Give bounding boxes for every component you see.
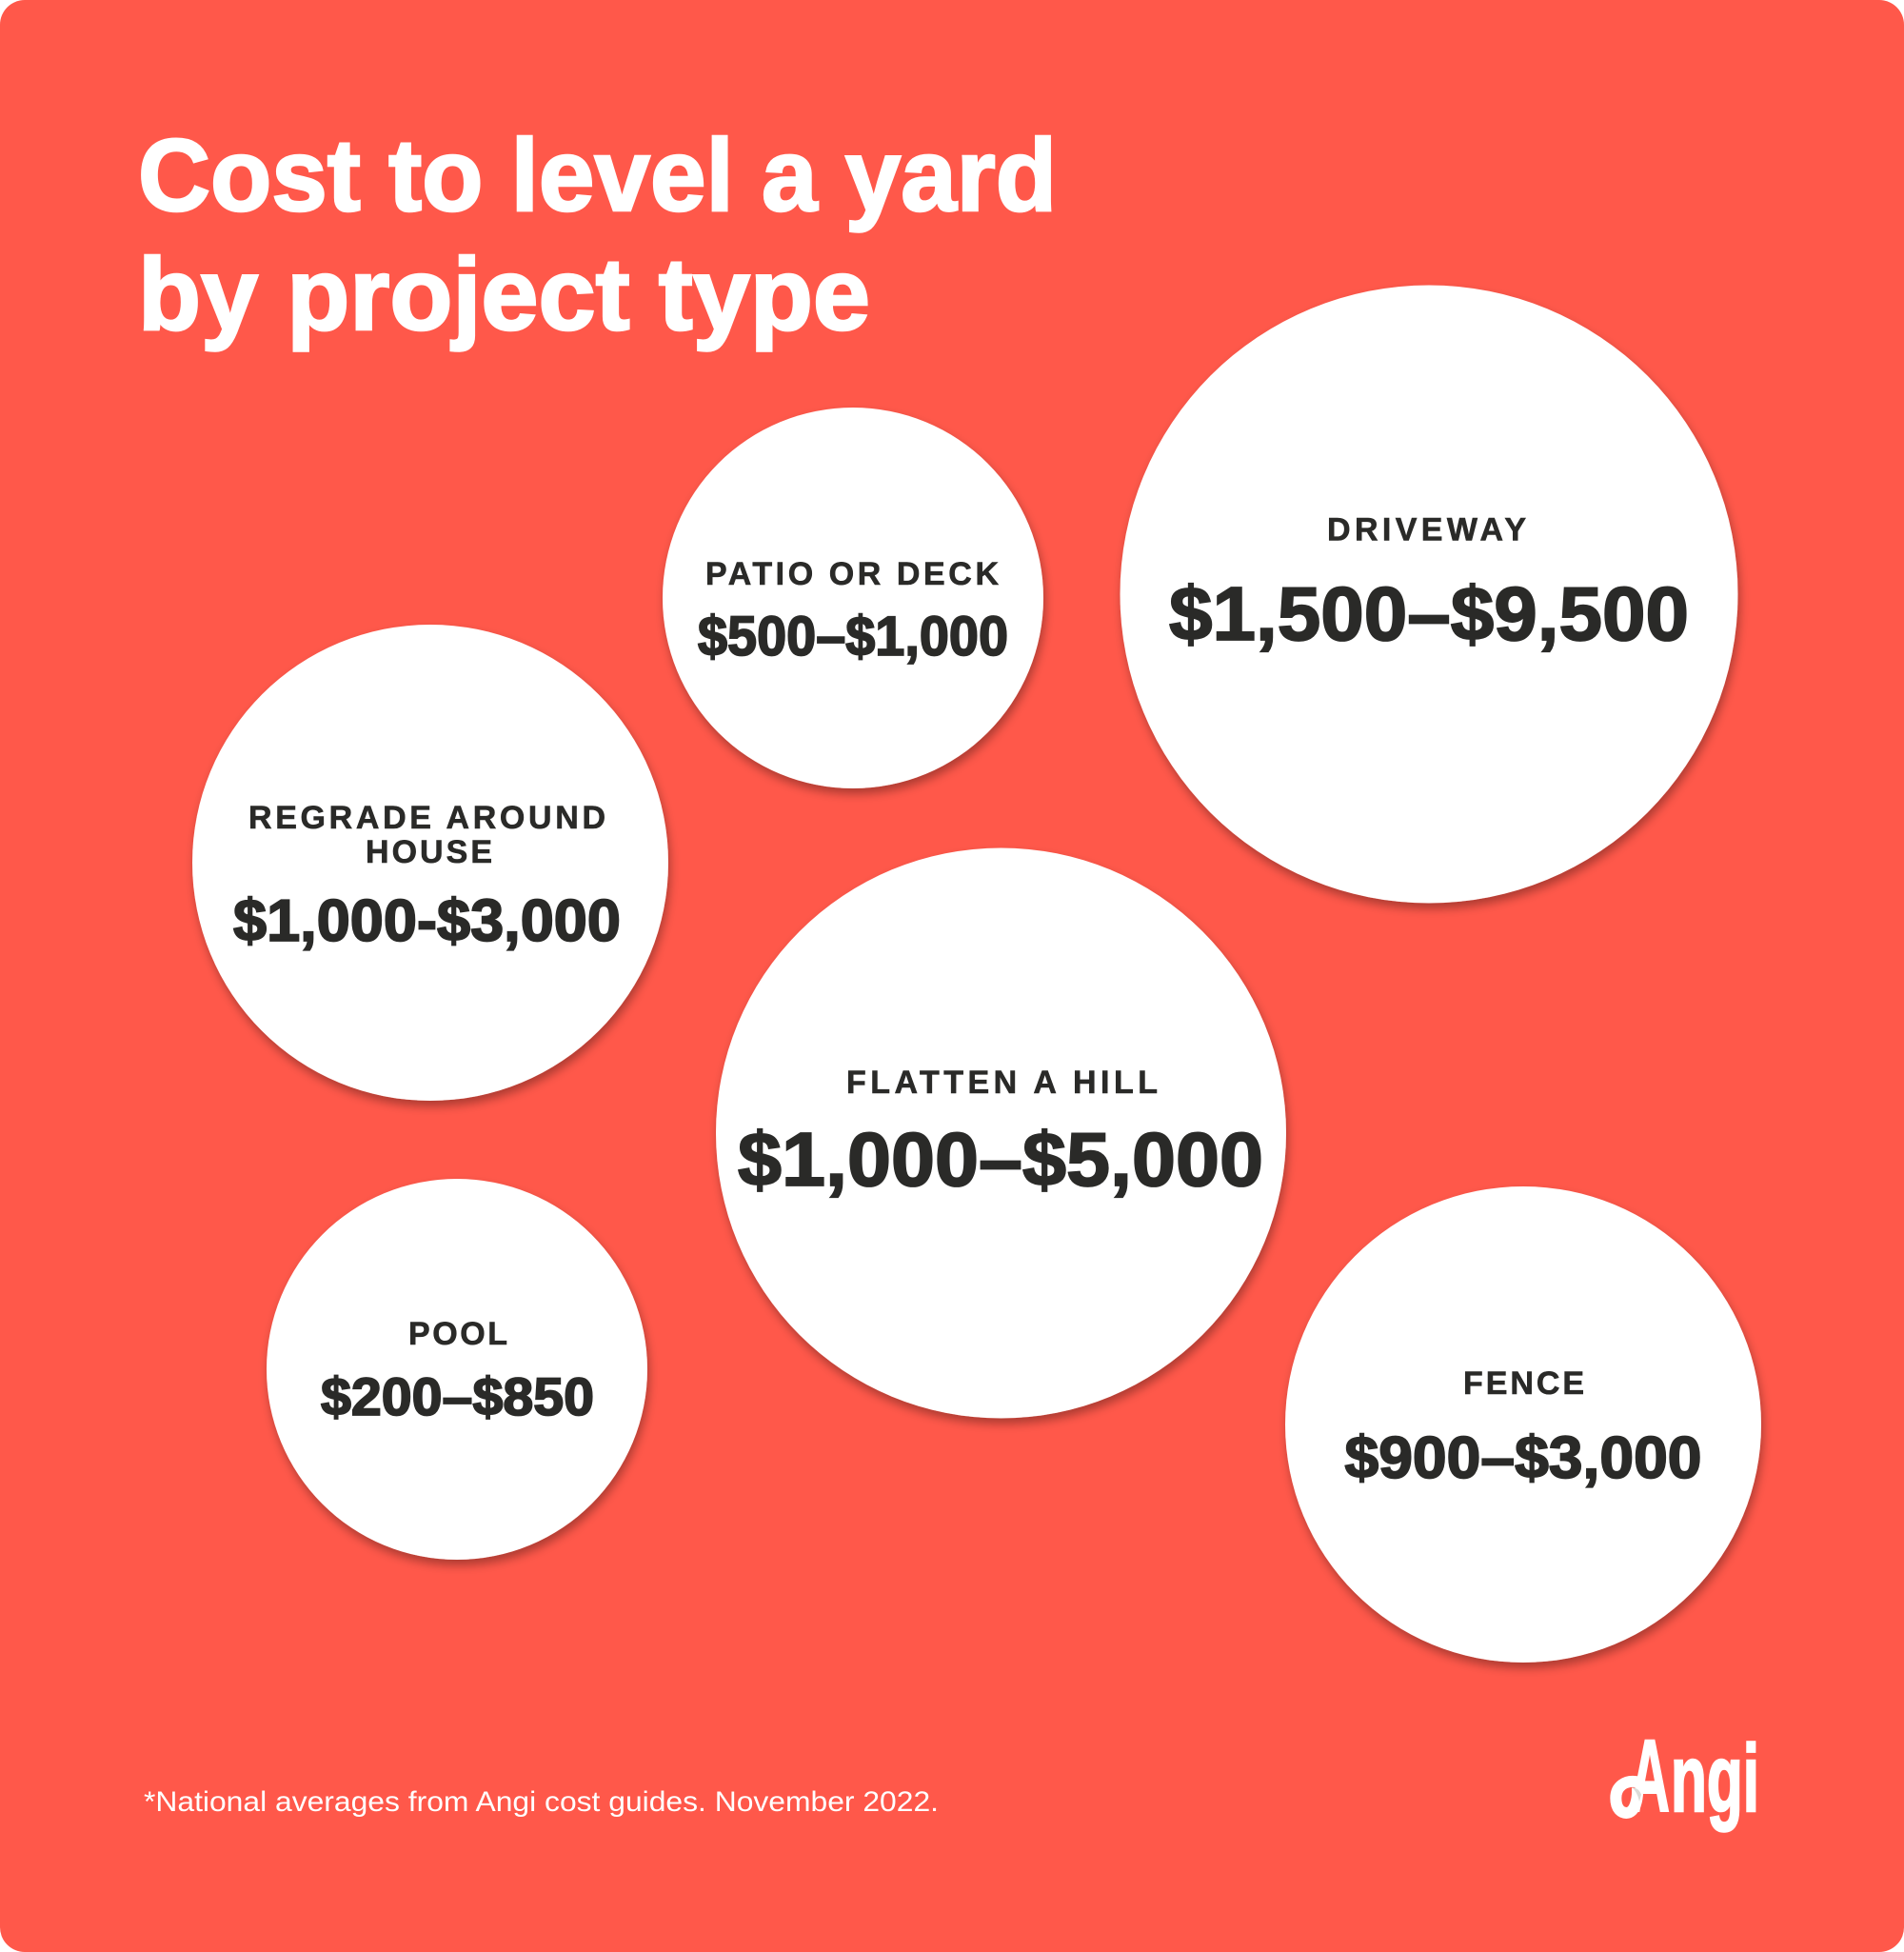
- bubble: fence: [1285, 1186, 1761, 1663]
- logo: Angi: ngi: [1671, 1725, 1759, 1832]
- label: regrade around house: HOUSE: [366, 834, 492, 870]
- amount: fence: $900–$3,000: [1344, 1425, 1702, 1491]
- title: Cost to level a yard: [138, 117, 1057, 232]
- label: flatten a hill: FLATTEN A HILL: [846, 1065, 1158, 1101]
- logo: Angi: [1616, 1718, 1759, 1833]
- bubble: driveway: [1120, 286, 1738, 903]
- amount: flatten a hill: $1,000–$5,000: [738, 1117, 1263, 1202]
- label: driveway: DRIVEWAY: [1327, 512, 1526, 548]
- amount: pool: $200–$850: [321, 1366, 594, 1426]
- label: pool: POOL: [408, 1316, 507, 1352]
- footnote: *National averages from Angi cost guides. November 2022.: [144, 1786, 939, 1818]
- amount: driveway: $1,500–$9,500: [1169, 571, 1689, 656]
- title: by project type: [138, 236, 870, 351]
- bubble: patio or deck: [663, 408, 1043, 788]
- label: regrade around house: [248, 800, 605, 870]
- amount: regrade around house: $1,000-$3,000: [233, 888, 621, 954]
- logo: Angi: A: [1630, 1718, 1670, 1833]
- bubble: regrade around house: [192, 625, 668, 1101]
- title: [138, 117, 1057, 351]
- amount: patio or deck: $500–$1,000: [698, 606, 1008, 667]
- bubble: flatten a hill: [716, 847, 1286, 1419]
- label: patio or deck: PATIO OR DECK: [705, 556, 999, 592]
- label: fence: FENCE: [1463, 1365, 1584, 1402]
- label: regrade around house: REGRADE AROUND: [248, 800, 605, 836]
- bubble: pool: [267, 1179, 647, 1560]
